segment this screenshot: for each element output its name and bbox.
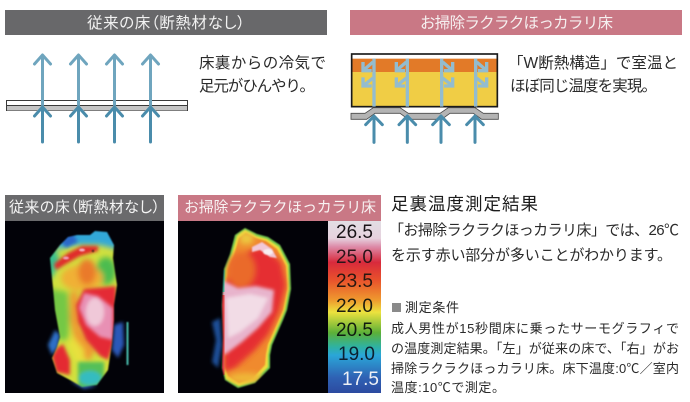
panel: new floor header: お掃除ラクラクほっカラリ床 xyxy=(420,14,613,32)
incoming cold air arrows xyxy=(366,116,483,142)
temperature scale: 26.5 xyxy=(336,222,373,243)
text: measurement conditions: の温度測定結果。「左」が従来の床で、「右」がお xyxy=(391,341,679,356)
thermograph header: お掃除ラクラクほっカラリ床 xyxy=(184,198,376,216)
text: measurement conditions: 温度:10℃で測定。 xyxy=(391,377,505,396)
panel: conventional floor thermograph xyxy=(5,195,164,395)
panel: new floor thermograph xyxy=(178,195,381,393)
floor board xyxy=(6,100,188,110)
text: result summary: を示す赤い部分が多いことがわかります。 xyxy=(391,246,672,264)
temperature scale: 25.0 xyxy=(336,247,373,268)
temperature scale: 17.5 xyxy=(342,369,379,390)
heading: measurement result: 足裏温度測定結果 xyxy=(391,194,538,214)
floor layers xyxy=(352,54,497,107)
support plate xyxy=(351,108,498,119)
text: result summary: 「お掃除ラクラクほっカラリ床」では、26℃ xyxy=(389,219,679,240)
text: conventional floor description: 床裏からの冷気で xyxy=(199,54,326,72)
text: new floor description xyxy=(508,54,678,95)
thermal image: right foot xyxy=(210,227,292,389)
thermal image: left foot xyxy=(46,230,130,392)
temperature scale: 20.5 xyxy=(336,320,373,341)
panel: new floor header xyxy=(350,10,682,35)
text: conventional floor description xyxy=(199,54,326,95)
temperature scale xyxy=(328,221,381,393)
text: conventional floor description: 足元がひんやり。 xyxy=(199,77,315,95)
heat retention arrows xyxy=(363,59,487,107)
lower arrows xyxy=(34,107,158,142)
temperature scale: 19.0 xyxy=(338,344,375,365)
text: result summary xyxy=(389,219,679,264)
text: measurement conditions: 成人男性が15秒間床に乗ったサーモグラフィで xyxy=(391,321,679,336)
diagram: double insulation floor xyxy=(351,54,498,142)
panel: conventional floor header: 従来の床（断熱材なし） xyxy=(87,11,245,33)
temperature scale: 22.0 xyxy=(336,296,373,317)
diagram: conventional floor with cold air arrows xyxy=(6,55,188,142)
upper arrows xyxy=(34,55,158,105)
text: new floor description: 「W断熱構造」で室温と xyxy=(508,54,678,72)
conditions marker xyxy=(392,303,401,312)
text: measurement conditions: 測定条件 xyxy=(405,300,459,315)
text: measurement conditions: 掃除ラクラクほっカラリ床。床下温度:0℃／室内 xyxy=(391,358,679,377)
text: new floor description: ほぼ同じ温度を実現。 xyxy=(510,77,657,95)
panel: conventional floor header xyxy=(5,10,327,35)
thermograph header xyxy=(178,195,381,221)
text: measurement conditions xyxy=(391,300,679,396)
thermograph header: 従来の床（断熱材なし） xyxy=(9,196,160,217)
temperature scale: 23.5 xyxy=(336,271,373,292)
